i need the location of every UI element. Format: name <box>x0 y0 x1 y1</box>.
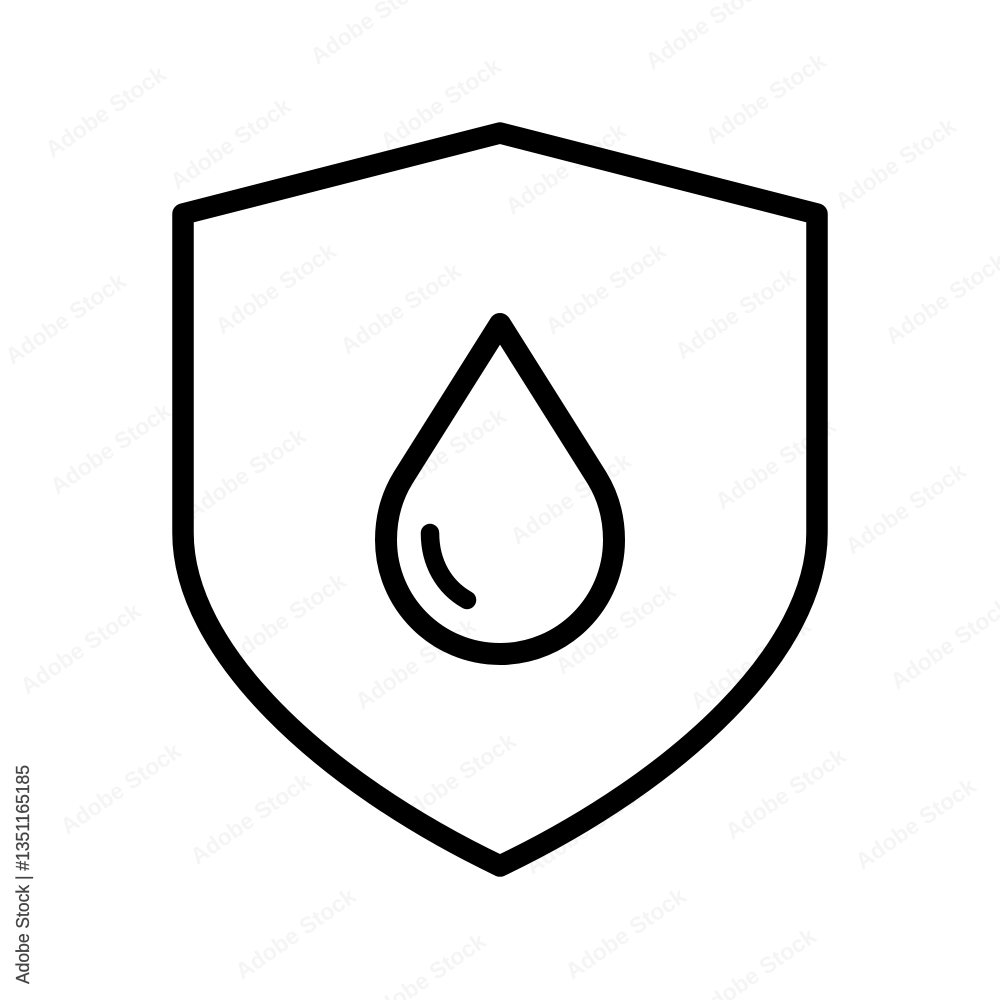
watermark pattern: Adobe Stock <box>375 52 506 154</box>
watermark pattern: Adobe Stock <box>15 597 146 699</box>
water drop outline <box>386 324 614 654</box>
watermark pattern: Adobe Stock <box>180 422 311 524</box>
watermark pattern: Adobe Stock <box>670 262 801 364</box>
watermark pattern: Adobe Stock <box>55 737 186 839</box>
watermark pattern: Adobe Stock <box>210 237 341 339</box>
watermark pattern: Adobe Stock <box>830 112 961 214</box>
watermark pattern: Adobe Stock <box>720 742 851 844</box>
watermark pattern: Adobe Stock <box>685 612 816 714</box>
watermark pattern: Adobe Stock <box>550 577 681 679</box>
watermark pattern: Adobe Stock <box>560 882 691 984</box>
watermark pattern: Adobe Stock <box>850 772 981 874</box>
watermark pattern: Adobe Stock <box>230 882 361 984</box>
watermark pattern: Adobe Stock <box>0 267 131 369</box>
watermark pattern: Adobe Stock <box>45 397 176 499</box>
stock id caption: Adobe Stock | #1351165185 <box>13 765 33 984</box>
watermark pattern: Adobe Stock <box>700 47 831 149</box>
watermark pattern: Adobe Stock <box>505 447 636 549</box>
watermark pattern: Adobe Stock <box>40 60 171 162</box>
watermark pattern: Adobe Stock <box>390 727 521 829</box>
shield outline <box>183 133 817 866</box>
watermark pattern: Adobe Stock <box>840 457 971 559</box>
watermark pattern: Adobe Stock <box>500 117 631 219</box>
watermark pattern: Adobe Stock <box>350 612 481 714</box>
water drop highlight <box>430 533 467 600</box>
watermark pattern: Adobe Stock <box>540 237 671 339</box>
watermark pattern: Adobe Stock <box>335 257 466 359</box>
watermark pattern: Adobe Stock <box>380 402 511 504</box>
watermark pattern: Adobe Stock <box>220 567 351 669</box>
watermark pattern: Adobe Stock <box>165 92 296 194</box>
watermark pattern: Adobe Stock <box>520 777 651 879</box>
watermark pattern: Adobe Stock <box>710 412 841 514</box>
watermark pattern: Adobe Stock <box>185 767 316 869</box>
